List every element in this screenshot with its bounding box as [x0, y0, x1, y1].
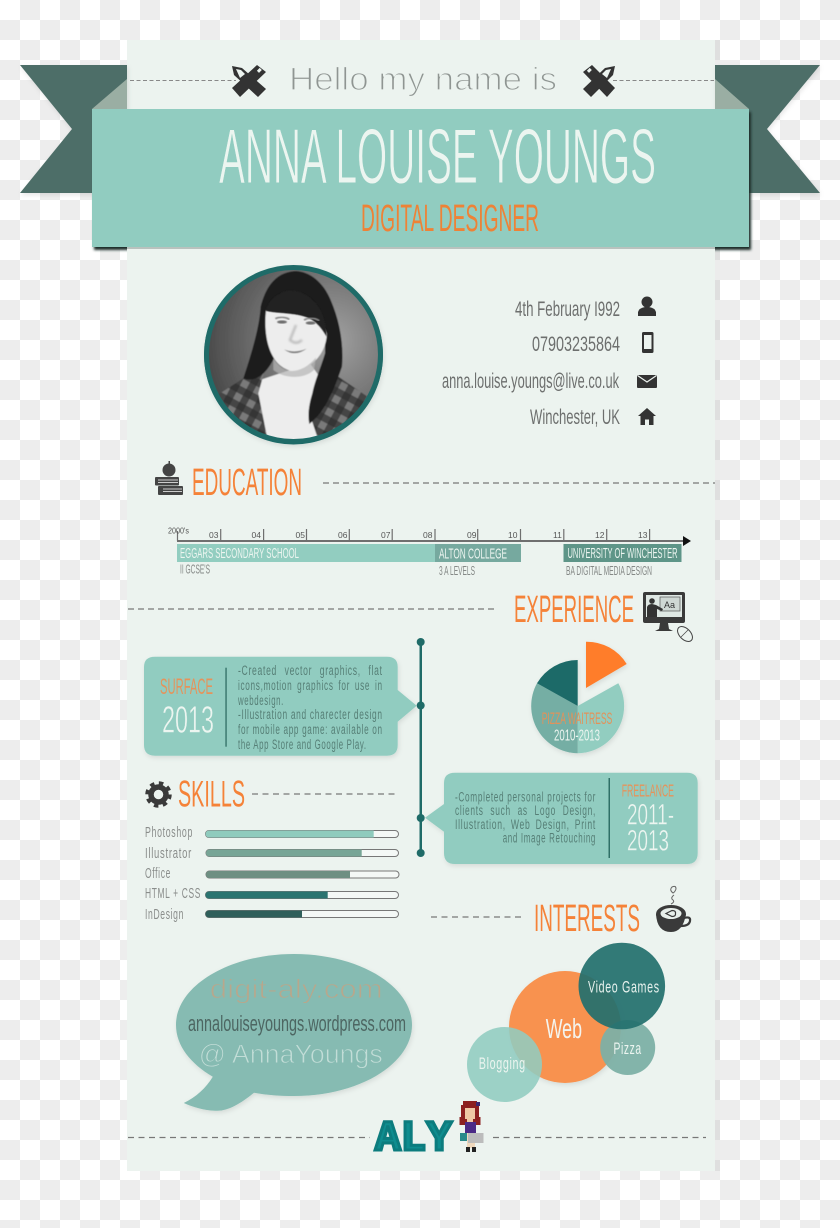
hello left dashes: [130, 80, 236, 82]
icon: crossed pencils right: [583, 65, 615, 97]
bar: Eggars secondary school: [177, 544, 435, 562]
label: HTML + CSS: HTML + CSS: [145, 886, 201, 902]
location: Winchester, UK: [530, 405, 620, 429]
surface divider: [225, 668, 227, 747]
timeline year labels: 03: [209, 530, 219, 540]
note: GCSEs: II GCSE'S: [180, 562, 210, 576]
timeline year labels: 11: [553, 530, 562, 540]
pie label: job: PIZZA WAITRESS: [542, 710, 612, 728]
pie slice: orange: [586, 642, 627, 688]
label: Alton: ALTON COLLEGE: [439, 546, 507, 562]
timeline year labels: 10: [508, 530, 518, 540]
ribbon: left fold: [92, 79, 127, 109]
bar: Illustrator: [206, 850, 398, 856]
timeline axis: [177, 529, 684, 541]
timeline year labels: 13: [638, 530, 648, 540]
education dashed line: [323, 482, 715, 484]
heading: education: [155, 461, 715, 504]
experience timeline: [417, 638, 425, 857]
hello row: [130, 61, 714, 97]
freelance description: and Image Retouching: [503, 831, 596, 846]
freelance description: -Completed personal projects for: [455, 790, 596, 805]
icon: person: [638, 296, 656, 316]
surface description: [237, 663, 383, 752]
photo portrait: [204, 266, 383, 444]
bar: Photoshop: [206, 830, 398, 838]
label: InDesign: InDesign: [145, 907, 184, 923]
education timeline: [168, 526, 691, 578]
footer right dashes: [493, 1136, 706, 1138]
icon: monitor and mouse: [643, 592, 695, 644]
bar: InDesign: [206, 910, 398, 918]
callout: Freelance: FREELANCE: [622, 781, 674, 801]
label: blogging: Blogging: [479, 1054, 526, 1073]
icon: crossed pencils left: [232, 65, 266, 97]
logo ALY: ALY: [375, 1114, 452, 1163]
label: Illustrator: Illustrator: [145, 846, 192, 862]
bar: Alton College: [435, 544, 521, 562]
icon: gear: [148, 784, 170, 806]
ribbon: right fold: [715, 79, 749, 109]
pie chart: pizza waitress: [531, 642, 627, 753]
icon: coffee cup: [656, 886, 690, 932]
label: web: Web: [546, 1013, 582, 1044]
timeline year labels: 09: [467, 530, 477, 540]
skills dashed line: [252, 793, 397, 795]
timeline year labels: 08: [423, 530, 433, 540]
timeline arrow: [683, 536, 691, 546]
icon: pixel character: [460, 1101, 484, 1152]
skills title: SKILLS: [178, 774, 245, 815]
heading: interests: [431, 886, 690, 940]
freelance divider: [608, 778, 610, 858]
banner shadow: [94, 112, 751, 255]
circle: blogging: [467, 1027, 542, 1102]
heading: experience: [128, 589, 695, 644]
ribbon: right tail: [715, 65, 820, 193]
surface year: 2013: [162, 700, 214, 742]
icon: home: [638, 408, 656, 425]
heading: experience: EXPERIENCE: [514, 589, 634, 631]
timeline year labels: 2000's: [168, 526, 189, 536]
link: blog: annalouiseyoungs.wordpress.com: [188, 1011, 406, 1036]
timeline year labels: 04: [252, 530, 261, 540]
note: A levels: 3 A LEVELS: [439, 564, 475, 578]
venn: interests: [467, 943, 665, 1102]
label: Photoshop: Photoshop: [145, 825, 193, 841]
surface title: SURFACE: [160, 674, 213, 699]
note: BA: BA DIGITAL MEDIA DESIGN: [566, 564, 652, 578]
surface description: webdesign.: [237, 693, 284, 708]
timeline year labels: 12: [595, 530, 605, 540]
freelance years: 2011-: [627, 798, 674, 831]
surface description: icons,motion graphics for use in: [238, 678, 383, 693]
heading: education: EDUCATION: [192, 462, 302, 504]
icon: phone: [642, 332, 654, 353]
bar: HTML + CSS: [206, 892, 398, 898]
heading: skills: [148, 774, 397, 815]
hello right dashes: [613, 80, 714, 82]
link: twitter: @ AnnaYoungs: [199, 1039, 383, 1069]
timeline year labels: 06: [338, 530, 348, 540]
timeline year labels: 05: [296, 530, 305, 540]
label: video games: Video Games: [588, 978, 660, 996]
circle: pizza: [600, 1020, 655, 1075]
date of birth: 4th February I992: [515, 297, 620, 321]
subtitle: role: DIGITAL DESIGNER: [361, 198, 539, 240]
bar: Office: [206, 871, 399, 878]
timeline year labels: 07: [381, 530, 391, 540]
label: University: UNIVERSITY OF WINCHESTER: [568, 546, 678, 562]
timeline year labels: [168, 526, 648, 540]
freelance description: Illustration, Web Design, Print: [455, 817, 596, 832]
panel: page sheet: [127, 40, 720, 1171]
label: pizza: Pizza: [614, 1039, 642, 1058]
label: Eggars: EGGARS SECONDARY SCHOOL: [180, 546, 299, 562]
freelance description: [455, 790, 596, 846]
interests dashed line: [431, 916, 523, 918]
circle: video games: [578, 943, 665, 1029]
phone number: 07903235864: [532, 332, 620, 356]
surface description: -Created vector graphics, flat: [238, 663, 383, 678]
skills list: [145, 825, 399, 923]
pie slice: light: [578, 683, 624, 753]
surface description: the App Store and Google Play.: [238, 737, 367, 752]
link: website: digit-aly.com: [210, 974, 383, 1004]
icon: books and apple: [155, 461, 183, 495]
callout: Freelance: 2013: [627, 825, 669, 858]
heading: interests: INTERESTS: [534, 898, 640, 940]
speech bubble: contact links: [176, 954, 412, 1111]
banner: [92, 109, 749, 247]
callout: Freelance: [425, 773, 698, 864]
pie slice: dark: [537, 660, 578, 706]
pie label: years: 2010-2013: [554, 728, 600, 745]
bar: University of Winchester: [564, 544, 682, 562]
email: anna.louise.youngs@live.co.uk: [442, 369, 619, 393]
surface description: -Illustration and charecter design: [238, 707, 383, 722]
footer left dashes: [128, 1136, 370, 1138]
hello text: Hello my name is: [289, 61, 557, 97]
ribbon: left tail: [20, 65, 127, 193]
surface description: for mobile app game: available on: [238, 722, 383, 737]
label: Office: Office: [145, 866, 171, 882]
footer: [128, 1101, 706, 1163]
experience dashed line: [128, 608, 494, 610]
contact details: [442, 297, 620, 429]
icon: monitor and mouse: Aa: [664, 600, 675, 610]
icon: envelope: [637, 375, 657, 388]
callout: Surface: [144, 657, 417, 756]
pie slice: medium: [531, 683, 578, 753]
freelance description: clients such as Logo Design,: [455, 803, 596, 818]
circle: web: [509, 971, 621, 1083]
